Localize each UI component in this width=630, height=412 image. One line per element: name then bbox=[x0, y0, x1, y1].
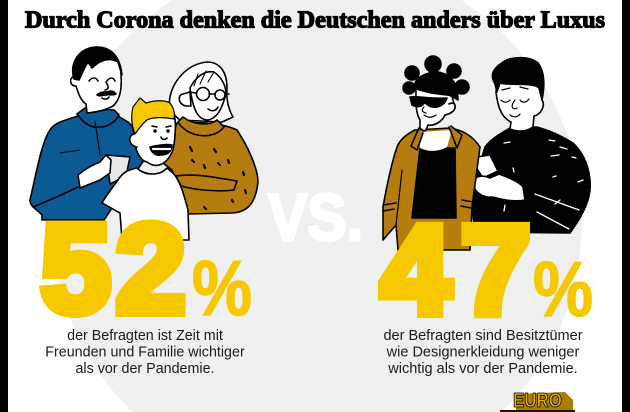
caption right bbox=[383, 328, 583, 377]
caption left: der Befragten ist Zeit mit bbox=[67, 328, 223, 344]
boy in white shirt bbox=[102, 98, 189, 240]
caption right: wichtig als vor der Pandemie. bbox=[387, 361, 578, 377]
statistic: 47 percent: % bbox=[533, 245, 593, 333]
logo: Euro: EURO bbox=[513, 389, 562, 411]
statistic: 52 percent: 2 bbox=[116, 200, 186, 339]
man in blue shirt bbox=[30, 47, 146, 220]
person in ochre jacket bbox=[383, 56, 480, 250]
statistic: 47 percent: 7 bbox=[461, 201, 531, 340]
illustration: fashion couple bbox=[383, 56, 590, 250]
caption left bbox=[45, 328, 245, 377]
statistic: 52 percent: 5 bbox=[41, 200, 111, 339]
person in black sweater bbox=[470, 58, 590, 233]
statistic: 47 percent bbox=[381, 201, 593, 340]
caption left: als vor der Pandemie. bbox=[75, 361, 215, 377]
statistic: 52 percent: % bbox=[192, 244, 252, 332]
title: Durch Corona denken die Deutschen anders über Luxus bbox=[25, 6, 605, 34]
VS text: VS. bbox=[268, 180, 363, 254]
caption right: wie Designerkleidung weniger bbox=[386, 344, 579, 360]
statistic: 47 percent: 4 bbox=[381, 201, 451, 340]
logo: Euro bbox=[500, 389, 575, 412]
woman in brown sweater bbox=[163, 62, 258, 214]
right black edge bbox=[622, 0, 630, 412]
left black edge bbox=[0, 0, 8, 412]
caption right: der Befragten sind Besitztümer bbox=[383, 328, 583, 344]
caption left: Freunden und Familie wichtiger bbox=[45, 344, 245, 360]
illustration: family bbox=[30, 47, 258, 240]
statistic: 52 percent bbox=[41, 200, 252, 339]
